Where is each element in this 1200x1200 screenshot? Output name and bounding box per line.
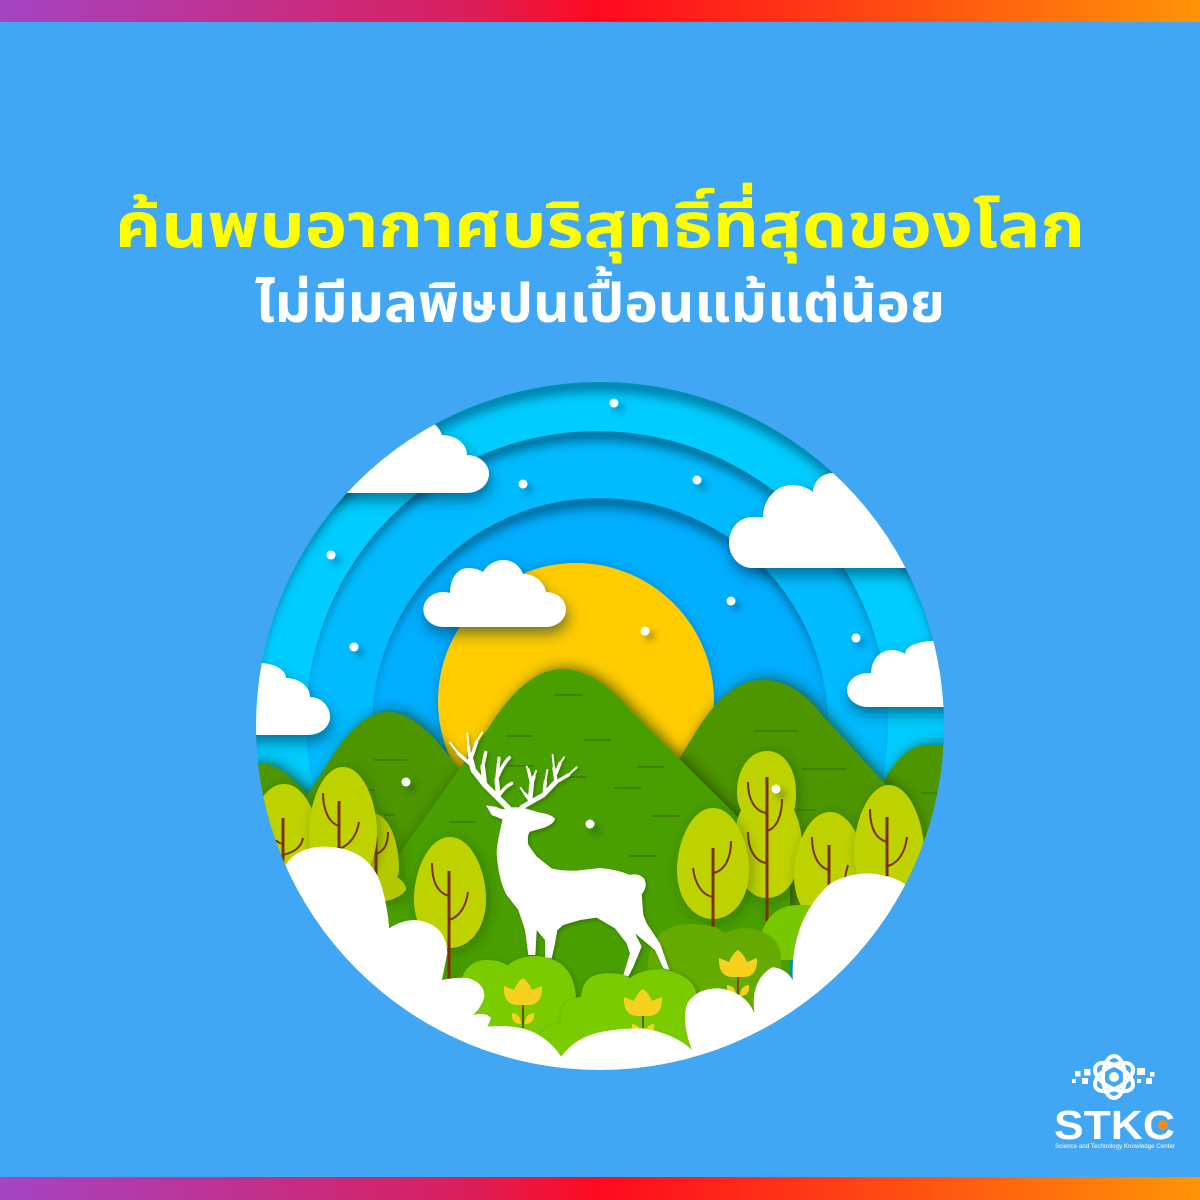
cloud top-left	[300, 423, 489, 493]
left mountain	[304, 701, 466, 952]
tree tall right	[734, 751, 802, 921]
logo tagline: Science and Technology Knowledge Center	[1055, 1144, 1175, 1150]
sky middle ring	[306, 431, 888, 786]
sun	[433, 559, 718, 769]
tree right 2	[790, 810, 857, 905]
tree centre-left	[414, 837, 486, 980]
tulip back	[719, 950, 757, 1000]
title line 2: ไม่มีมลพิษปนเปื้อนแม้แต่น้อย	[255, 266, 945, 334]
far mountains	[230, 745, 960, 900]
tulip centre	[624, 989, 662, 1030]
deer antlers	[450, 733, 577, 808]
cloud left	[230, 663, 330, 735]
cloud centre	[423, 560, 566, 627]
floating dots	[326, 398, 860, 828]
centre mountain	[380, 669, 790, 1000]
sky clouds group	[230, 423, 960, 735]
logo orange dot	[1158, 1120, 1168, 1130]
right mountain	[660, 680, 900, 950]
tree behind	[370, 814, 413, 910]
title	[115, 182, 1085, 334]
cloud right	[847, 641, 960, 707]
logo pixel squares	[1072, 1068, 1154, 1084]
cloud top-right	[729, 473, 960, 568]
tulip left	[504, 978, 542, 1028]
bottom white clouds	[286, 846, 906, 1070]
deer body	[486, 805, 669, 977]
logo atom icon	[1090, 1056, 1138, 1098]
front bush right	[531, 969, 696, 1067]
tree right 3	[854, 785, 924, 905]
paper-cut circular scene	[256, 382, 944, 1070]
sky inner ring	[372, 498, 828, 739]
mountain dashes	[364, 695, 679, 856]
right mountain dashes	[754, 731, 937, 810]
logo wordmark: STKC	[1054, 1102, 1175, 1148]
bushes behind the deer	[647, 905, 817, 1040]
bottom gradient bar	[0, 1177, 1200, 1200]
sky outer ring	[243, 382, 957, 1099]
top gradient bar	[0, 0, 1200, 22]
deer	[450, 733, 669, 977]
tree left tall	[309, 767, 377, 885]
logo: STKC	[1054, 1056, 1175, 1150]
title line 1: ค้นพบอากาศบริสุทธิ์ที่สุดของโลก	[115, 182, 1085, 263]
front bushes	[460, 956, 576, 1040]
tree right 1	[677, 808, 749, 928]
tree far left	[263, 782, 313, 895]
